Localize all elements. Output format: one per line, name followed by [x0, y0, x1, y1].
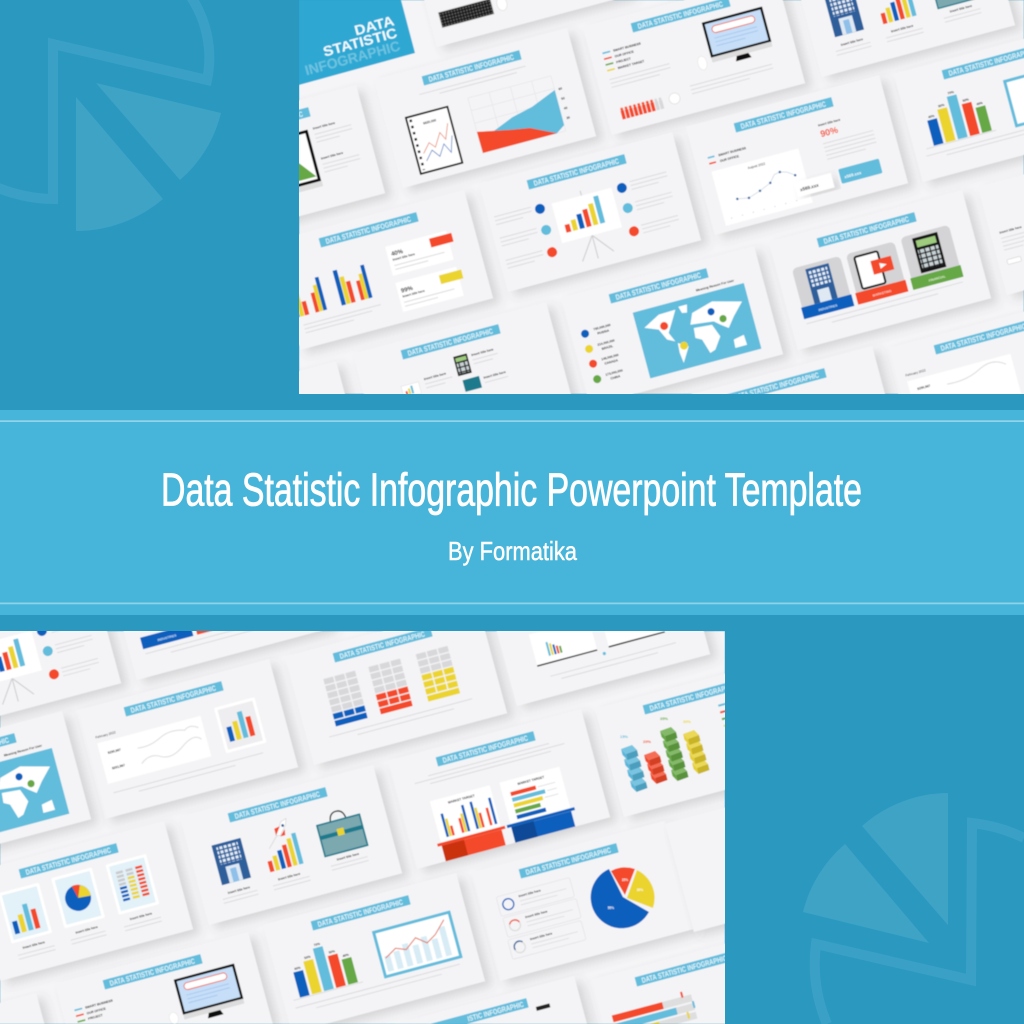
- card: bars: [0, 883, 52, 944]
- pie chart: 55%: [608, 906, 614, 910]
- framed line chart: [374, 912, 461, 977]
- icon: bag: [315, 806, 368, 857]
- table: red: [367, 658, 413, 715]
- line chart card: [711, 148, 813, 226]
- slide: three icon cards (bottom): [108, 520, 330, 680]
- area chart: 40: [563, 106, 568, 111]
- slide: notebook and area chart: [374, 28, 596, 188]
- map title: Meaning Reason For User: [3, 743, 43, 758]
- bar chart: 70%: [947, 90, 955, 95]
- cube column: red: [643, 739, 668, 784]
- watermark: pie icon bottom right: [803, 793, 1024, 1024]
- card: [907, 354, 1021, 422]
- slide heading: [311, 895, 411, 930]
- slide heading: [124, 681, 224, 716]
- watermark: pie icon top left: [0, 0, 221, 231]
- slide: world map: [561, 246, 783, 406]
- slide heading: [609, 268, 709, 303]
- gauge row 3: [508, 920, 586, 959]
- map legend: [580, 323, 625, 385]
- text block: Insert title here: [999, 225, 1022, 235]
- legend: OUR OFFICE: [86, 1007, 106, 1016]
- cover title: [304, 16, 400, 76]
- slide: lower left blank (bottom): [0, 993, 44, 1024]
- cube column: yellow: [683, 719, 710, 774]
- slide: February chart (bottom): [76, 659, 298, 819]
- slide heading: [0, 733, 17, 768]
- legend: [74, 998, 116, 1024]
- world map: [633, 283, 761, 378]
- slide: February chart (bottom): February 2022: [95, 730, 116, 740]
- icon: notebook with line chart: $620,000: [423, 118, 437, 125]
- slide: pie chart and gauges: [471, 821, 693, 981]
- map title: Meaning Reason For User: [695, 278, 735, 293]
- bar chart: 40%: [294, 966, 301, 971]
- slide heading: [817, 212, 917, 247]
- gauge row 2: [503, 898, 581, 937]
- slide: tablet with text blocks: [299, 88, 394, 226]
- area chart: [476, 86, 570, 154]
- bar chart: [926, 90, 996, 150]
- slide heading: DATA STATISTIC INFOGRAPHIC: [109, 956, 196, 988]
- card: marketing: [845, 241, 908, 305]
- area chart: 30: [566, 115, 571, 120]
- map legend: 146,000,000: [601, 353, 619, 361]
- slide: bars with framed line chart: [263, 873, 485, 1024]
- world map: [0, 748, 69, 843]
- board right: [600, 599, 669, 648]
- slide: small icons with text: Insert title here: [423, 371, 447, 381]
- card: trend lines: $290,967: [107, 748, 121, 755]
- chart: market target horizontal bars: MARKET TARGET: [517, 775, 545, 786]
- captions: Insert title here: [75, 925, 98, 935]
- framed chart: [1005, 61, 1024, 126]
- slide: bar chart with frame: [926, 38, 1024, 188]
- legend: SMART BUSINESS: [85, 998, 113, 1010]
- legend: OUR OFFICE: [719, 154, 739, 163]
- bar chart: 40%: [342, 953, 349, 958]
- map legend: 214,000,000: [597, 338, 615, 347]
- icon: bag: [930, 0, 981, 9]
- slide: lower left blank: [143, 361, 365, 521]
- label: industries: [140, 624, 193, 649]
- legend: [718, 703, 732, 727]
- icon: mouse: [168, 1011, 180, 1024]
- slide heading: DATA STATISTIC INFOGRAPHIC: [339, 629, 426, 661]
- icon: calculator: [453, 353, 472, 376]
- chart: market target bars: [430, 785, 501, 844]
- grouped bar chart: [286, 263, 373, 318]
- slide heading: DATA STATISTIC INFOGRAPHIC: [407, 326, 494, 358]
- gauge row 2: Insert title here: [525, 909, 548, 919]
- podium: red: [437, 826, 510, 862]
- band: title: [0, 410, 1024, 615]
- slide heading: DATA STATISTIC INFOGRAPHIC: [733, 370, 820, 402]
- icon: monitor: [174, 965, 246, 1024]
- slide: block tables: [285, 605, 507, 765]
- slide heading: [19, 843, 119, 878]
- slide heading: DATA STATISTIC INFOGRAPHIC: [823, 214, 910, 246]
- slide heading: DATA STATISTIC INFOGRAPHIC: [234, 789, 321, 821]
- icon: tablet: [299, 129, 323, 192]
- markers: [534, 181, 640, 259]
- icon: bag: [463, 376, 482, 392]
- card: industries: INDUSTRIES: [818, 303, 838, 312]
- legend: PROJECT: [88, 1013, 103, 1021]
- bar chart: 70%: [313, 942, 321, 947]
- captions: Insert title here: [227, 885, 251, 895]
- card: stacked bars: [105, 854, 159, 915]
- bar chart: 40%: [976, 101, 983, 106]
- icon: building: [211, 838, 251, 885]
- captions: Insert title here: [891, 24, 914, 33]
- stat: 90%: 90%: [819, 125, 839, 139]
- slide heading: [429, 998, 529, 1024]
- line chart card: August 2022: [747, 162, 766, 170]
- table: yellow: [415, 645, 461, 702]
- icon: easel with bar chart: [0, 631, 48, 709]
- chart: market target horizontal bars: [499, 767, 571, 825]
- table: blue: [322, 670, 368, 727]
- card: financial: [899, 224, 964, 290]
- slide heading: [727, 368, 827, 403]
- cube column: red: 20%: [643, 739, 651, 744]
- captions: [833, 2, 983, 55]
- cube column: green: 35%: [660, 716, 668, 721]
- legend: SMART BUSINESS: [613, 41, 641, 53]
- icon: building: [824, 0, 864, 37]
- slide heading: [299, 106, 311, 120]
- map legend: 173,000,000: [605, 368, 623, 377]
- people pictogram: [619, 92, 682, 120]
- slide heading: DATA STATISTIC INFOGRAPHIC: [25, 845, 112, 877]
- stat card: 40%: [385, 229, 458, 276]
- slide heading: [527, 154, 627, 189]
- bar chart: 50%: [938, 103, 945, 108]
- slide heading: [319, 212, 419, 247]
- text block: insert title: [312, 117, 361, 172]
- icon: notebook with line chart: [406, 107, 462, 174]
- button value: [838, 158, 883, 184]
- bar chart: 40%: [928, 114, 935, 119]
- gauge row 1: Insert title here: [518, 888, 541, 898]
- legend: [707, 146, 748, 166]
- legend: OUR OFFICE: [614, 50, 634, 59]
- bar chart: [281, 934, 363, 1000]
- board left: [529, 618, 597, 667]
- icon: easel with bar chart: [552, 188, 622, 262]
- slide: monitor, legend and people: [583, 0, 805, 135]
- cube column: light blue: [620, 734, 648, 792]
- text block: insert title: Insert title here: [312, 121, 336, 131]
- slide heading: [519, 843, 619, 878]
- text block: insert title: Insert title here: [320, 151, 344, 161]
- slide heading: DATA STATISTIC INFOGRAPHIC: [428, 52, 515, 84]
- slide: three icon cards: [769, 190, 991, 350]
- slide heading: DATA STATISTIC INFOGRAPHIC: [442, 733, 529, 765]
- slide: right text: [665, 772, 887, 932]
- gauge row 3: Insert title here: [530, 931, 553, 941]
- callout value: x569.xxx: [799, 182, 820, 192]
- area chart: 50: [561, 96, 565, 101]
- icon: keyboard: [438, 0, 494, 28]
- card: trend lines: [97, 716, 211, 784]
- bar chart with rocket: [258, 817, 304, 872]
- slide heading: [401, 324, 501, 359]
- podium: blue: [507, 807, 579, 844]
- label: industries: INDUSTRIES: [157, 633, 177, 642]
- bar chart: 50%: [962, 97, 969, 103]
- stat card: 40%: Insert title here: [392, 252, 416, 262]
- map legend: CANADA: [604, 358, 619, 366]
- slide: keyboard: [408, 0, 630, 47]
- card: mini bar chart: [214, 697, 267, 753]
- slide heading: DATA STATISTIC INFOGRAPHIC: [533, 156, 620, 188]
- card: trend lines: $291,967: [112, 763, 126, 770]
- slide heading: DATA STATISTIC INFOGRAPHIC: [649, 681, 736, 713]
- captions: Insert title here: [278, 872, 301, 881]
- captions: Insert title here: [840, 37, 864, 47]
- bar chart: [875, 0, 917, 24]
- slide heading: [436, 731, 536, 766]
- icon: monitor: [702, 8, 774, 67]
- legend: [602, 41, 646, 73]
- panel: bottom slide collage: [0, 520, 887, 1024]
- map legend: RUSSIA: [597, 328, 610, 335]
- captions: [220, 850, 370, 903]
- slide heading: DATA STATISTIC INFOGRAPHIC: [317, 897, 404, 929]
- stat card: 99%: [395, 266, 468, 312]
- icon: mouse: [699, 58, 706, 69]
- slide: small icons with text: Insert title here: [471, 347, 494, 357]
- callout value: [794, 173, 835, 197]
- card: $290,967: [917, 384, 931, 391]
- slide: podium boards (top): [488, 546, 710, 706]
- bar chart: 50%: [304, 955, 311, 960]
- cover title: INFOGRAPHIC: [303, 37, 402, 78]
- icon: easel: [401, 382, 421, 398]
- horizontal bar chart: [610, 989, 698, 1024]
- card: industries: [791, 256, 854, 319]
- map legend: CHINA: [610, 374, 621, 381]
- captions: [16, 908, 162, 959]
- pie chart: 15%: [622, 878, 628, 882]
- slide: February chart (top): [886, 297, 1024, 457]
- label: marketing: [194, 610, 247, 635]
- slide: February chart (top): February 2022: [905, 368, 926, 378]
- cube column: green: [660, 716, 688, 781]
- slide: August line chart: [686, 75, 908, 235]
- slide heading: DATA STATISTIC INFOGRAPHIC: [130, 683, 217, 715]
- slide heading: DATA STATISTIC INFOGRAPHIC: [325, 214, 412, 246]
- slide: grouped bars with stat cards: [271, 190, 493, 350]
- captions: Insert title here: [336, 852, 360, 862]
- stat card: 99%: 99%: [401, 286, 414, 295]
- captions: Insert title here: [949, 4, 973, 14]
- label: marketing: MARKETING: [211, 619, 231, 628]
- cube column: light blue: 15%: [620, 734, 628, 739]
- slide: building, growth bars, bag (bottom): [180, 765, 402, 925]
- slide: small icons with text: Insert title here: [483, 370, 506, 380]
- slide heading: [643, 679, 743, 714]
- card: financial: FINANCIAL: [928, 274, 946, 283]
- slide: small icons with text: [353, 302, 575, 462]
- pie chart: 30%: [637, 888, 643, 892]
- slide heading: [422, 50, 522, 85]
- stat: 90%: [818, 118, 876, 160]
- slide: market charts on podiums: [388, 709, 610, 869]
- map legend: 750,000,000: [593, 323, 611, 331]
- slide heading: DATA STATISTIC INFOGRAPHIC: [217, 109, 304, 141]
- cover title: STATISTIC: [321, 24, 399, 60]
- button value: x569.xxx: [844, 170, 862, 179]
- text block: [999, 223, 1024, 265]
- area chart: 60: [558, 86, 563, 91]
- slide: world map (bottom): [0, 711, 91, 871]
- card: pie: [51, 867, 105, 928]
- slide: presentation board (bottom): [0, 575, 121, 735]
- slide: right text slide: [978, 135, 1024, 295]
- slide: partial heading: [679, 346, 901, 506]
- stat: 90%: Insert title here: [818, 118, 841, 127]
- map legend: BRAZIL: [601, 344, 614, 351]
- subtitle: By Formatika: [448, 536, 577, 566]
- legend: PROJECT: [616, 57, 631, 64]
- panel: top slide collage: [299, 0, 1024, 394]
- captions: Insert title here: [22, 940, 46, 950]
- slide heading: ISTIC INFOGRAPHIC: [466, 1000, 525, 1023]
- cover title: DATA: [353, 12, 396, 38]
- slide heading: DATA STATISTIC INFOGRAPHIC: [740, 99, 827, 131]
- slide: 3D cube columns: [595, 657, 817, 817]
- bar chart: 50%: [328, 949, 336, 955]
- cube column: yellow: 30%: [683, 719, 691, 724]
- captions: Insert title here: [129, 911, 153, 921]
- chart: market target bars: MARKET TARGET: [448, 794, 475, 805]
- slide heading: DATA STATISTIC INFOGRAPHIC: [641, 953, 728, 985]
- slide heading: [228, 787, 328, 822]
- slide: presentation board: [479, 132, 701, 292]
- slide heading: [734, 97, 834, 132]
- legend: MARKET TARGET: [617, 59, 645, 70]
- slide heading: [635, 951, 735, 986]
- markers: [36, 625, 60, 681]
- stat card: 99%: Insert title here: [402, 289, 425, 299]
- slide: building, growth bars, bag: [793, 0, 1015, 77]
- slide: three cards: [0, 821, 193, 981]
- gauge row 1: [496, 877, 575, 916]
- slide: horizontal bars: [587, 929, 806, 1024]
- legend: SMART BUSINESS: [718, 146, 746, 157]
- pie chart: [591, 867, 655, 928]
- slide: monitor, legend (bottom): [55, 932, 273, 1024]
- slide heading: [333, 627, 433, 662]
- slide heading: DATA STATISTIC INFOGRAPHIC: [615, 270, 702, 302]
- stat card: 40%: 40%: [391, 249, 404, 258]
- cover slide: [299, 0, 415, 85]
- slide heading: DATA STATISTIC INFOGRAPHIC: [525, 845, 612, 877]
- slide heading: [103, 954, 203, 989]
- card: marketing: MARKETING: [872, 289, 892, 298]
- slide: lower middle: [395, 976, 587, 1024]
